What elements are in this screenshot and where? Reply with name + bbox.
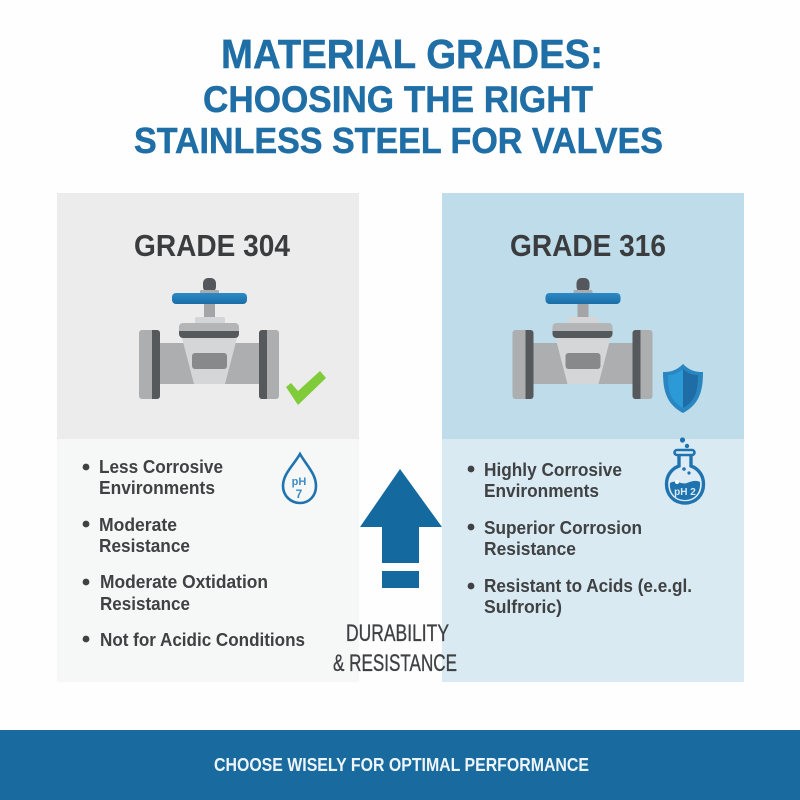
list: grade 304 properties: Not for Acidic Conditions [100,630,305,650]
list: grade 316 properties: Resistant to Acids (e.e.gl. [484,576,692,596]
list: grade 304 properties: Less Corrosive [99,457,223,477]
list: grade 304 properties [83,457,305,650]
list: grade 316 properties: Resistance [484,539,576,559]
icon: valve grade 304 [139,278,279,399]
icon: pH 2 flask [666,437,704,503]
list: grade 304 properties: Moderate Oxtidation [100,572,268,592]
arrow: durability upward [360,469,442,588]
panel: grade 316 [442,193,744,682]
icon: pH 7 water drop [283,454,316,503]
footer banner: CHOOSE WISELY FOR OPTIMAL PERFORMANCE [214,755,589,775]
list: grade 316 properties: Environments [484,481,599,501]
list: grade 304 properties: Moderate [99,515,177,535]
list: grade 304 properties: Environments [99,478,215,498]
list: grade 316 properties: Sulfroric) [484,597,562,617]
heading: grade 316: GRADE 316 [510,228,666,263]
footer banner [0,730,800,800]
label: durability and resistance [333,620,457,677]
label: durability and resistance: DURABILITY [346,620,449,647]
title: MATERIAL GRADES: [221,31,603,77]
icon: pH 7 water drop: 7 [296,487,303,501]
label: durability and resistance: & RESISTANCE [333,650,457,677]
icon: valve grade 316 [512,278,652,399]
list: grade 304 properties: Resistance [99,536,190,556]
list: grade 316 properties: Superior Corrosion [484,518,642,538]
title [134,31,663,161]
title: STAINLESS STEEL FOR VALVES [134,120,663,161]
icon: green check mark [286,371,326,405]
heading: grade 304: GRADE 304 [134,228,291,263]
icon: pH 2 flask: pH 2 [674,487,696,498]
list: grade 316 properties: Highly Corrosive [484,460,622,480]
icon: pH 7 water drop: pH [292,476,306,488]
title: CHOOSING THE RIGHT [203,79,593,120]
list: grade 316 properties [468,460,692,617]
panel: grade 304 [57,193,359,682]
list: grade 304 properties: Resistance [100,594,190,614]
icon: blue shield [663,364,703,413]
